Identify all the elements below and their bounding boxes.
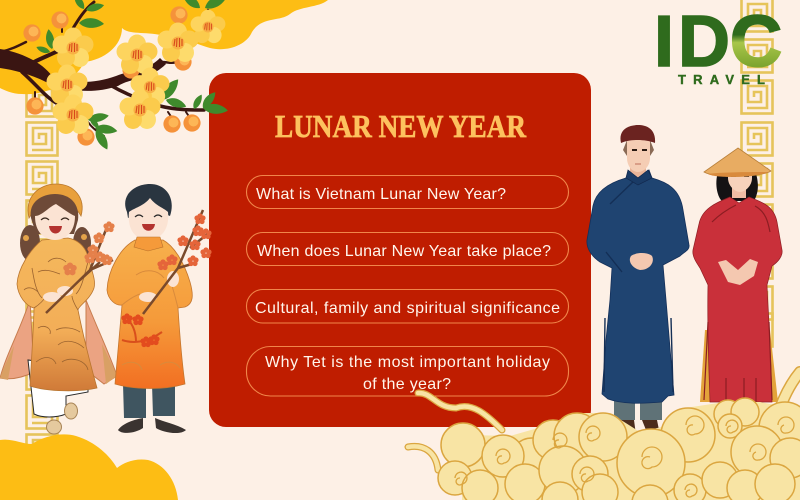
dress folds [704, 205, 772, 402]
buds [23, 6, 201, 146]
trousers [123, 384, 175, 418]
main red panel [209, 73, 591, 427]
eyes and mouth [135, 215, 162, 217]
question pill 2: When does Lunar New Year take place? [257, 243, 551, 260]
face [129, 198, 168, 240]
cloud base fill [462, 402, 800, 500]
hands [718, 259, 758, 285]
hands [139, 292, 157, 302]
question pill 4: of the year? [363, 376, 451, 393]
boy in ao dai [107, 184, 212, 433]
coat folds [604, 181, 673, 392]
question pill 2 [246, 232, 568, 266]
golden cloud cluster [408, 372, 800, 500]
peach branch [143, 210, 212, 314]
question pill 4 [246, 346, 568, 396]
neck [732, 184, 746, 198]
peach branch [46, 221, 115, 313]
dress arms and cloud details [24, 258, 88, 370]
eyes and mouth [632, 149, 647, 151]
shoes [619, 420, 660, 435]
neck [630, 165, 646, 179]
question pill 3: Cultural, family and spiritual significance [255, 300, 560, 317]
dress [17, 238, 97, 391]
yellow cloud top left [0, 0, 328, 94]
shoes [46, 420, 62, 434]
hat [28, 184, 82, 218]
logo letter C: C [730, 2, 782, 82]
yellow cloud bottom left [0, 434, 178, 500]
shoes [118, 418, 186, 433]
blossom branch [0, 0, 229, 152]
collar [626, 170, 652, 185]
conical hat [704, 148, 771, 176]
hair [716, 170, 758, 201]
logo tagline: TRAVEL [678, 72, 765, 87]
title: LUNAR NEW YEAR [275, 108, 527, 144]
pants [28, 360, 88, 417]
IDC Travel logo [654, 2, 782, 87]
cloud tails [408, 372, 800, 470]
collar [134, 237, 163, 251]
man in blue ao dai [587, 125, 689, 435]
hair [125, 184, 172, 218]
coat [587, 170, 689, 403]
hands [43, 292, 61, 302]
blossom pattern on coat [122, 316, 162, 342]
question pill 3 [246, 290, 568, 323]
trousers [614, 398, 662, 420]
eyes [731, 175, 749, 177]
face [728, 172, 752, 192]
cloud puffs [438, 398, 800, 500]
flowers [46, 10, 225, 134]
coat [107, 240, 192, 388]
hair [31, 194, 78, 234]
face [35, 204, 75, 240]
gold lining [700, 330, 778, 402]
braids [20, 225, 40, 261]
question pill 4: Why Tet is the most important holiday [265, 354, 550, 371]
dress [693, 197, 782, 402]
cloud spirals [455, 416, 794, 497]
woman in red ao dai [693, 148, 782, 402]
question pill 1 [246, 176, 568, 208]
question pill 1: What is Vietnam Lunar New Year? [256, 186, 506, 203]
face [627, 140, 650, 172]
decorative key column left [26, 84, 58, 468]
eyes and mouth [41, 218, 69, 220]
decorative key column right [742, 0, 772, 346]
logo wordmark: D [678, 2, 730, 82]
hands [630, 253, 653, 270]
side flaps [0, 300, 117, 384]
main limb [0, 49, 166, 91]
logo wordmark: I [654, 2, 674, 82]
hat [620, 125, 655, 143]
girl in ao dai [0, 184, 117, 434]
leaves [35, 0, 229, 152]
ears and hair [623, 140, 654, 156]
